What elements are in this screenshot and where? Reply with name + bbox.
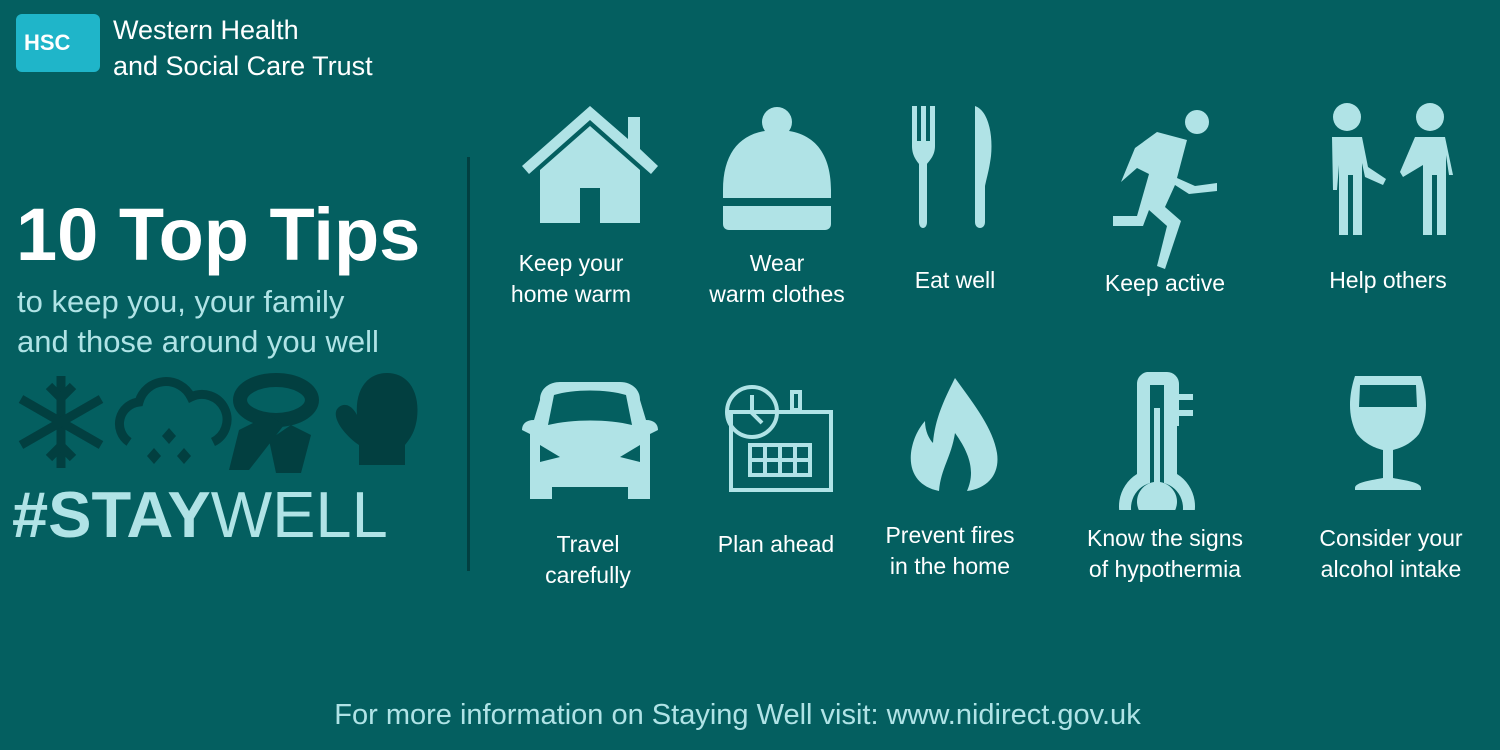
subtitle (17, 284, 379, 359)
label: clothes: warm clothes (709, 281, 845, 307)
org name: and Social Care Trust (113, 51, 373, 81)
icon: mitten (336, 373, 417, 465)
icon: plan (727, 387, 831, 490)
icon: hat (723, 107, 831, 230)
label: travel (545, 531, 631, 588)
label: clothes: Wear (750, 250, 804, 276)
footer: For more information on Staying Well visit: www.nidirect.gov.uk (334, 699, 1141, 731)
icon: cloud (119, 382, 227, 464)
label: alcohol: Consider your (1319, 525, 1463, 551)
label: hypothermia (1087, 525, 1243, 582)
label: fires: in the home (890, 553, 1010, 579)
label: home: home warm (511, 281, 631, 307)
icon: HSC badge (16, 14, 100, 72)
label: alcohol (1319, 525, 1463, 582)
label: clothes (709, 250, 845, 307)
divider (467, 157, 470, 571)
icon: car (522, 382, 658, 499)
label: travel: Travel (556, 531, 620, 557)
hashtag: #STAYWELL (12, 478, 388, 551)
icon: runner (1113, 110, 1217, 269)
label: hypothermia: Know the signs (1087, 525, 1243, 551)
subtitle: and those around you well (17, 324, 379, 359)
label: travel: carefully (545, 562, 631, 588)
winter icons (18, 373, 418, 473)
label: help: Help others (1329, 267, 1447, 293)
label: fires: Prevent fires (885, 522, 1015, 548)
label: hypothermia: of hypothermia (1089, 556, 1241, 582)
org name (113, 15, 373, 81)
label: active: Keep active (1105, 270, 1225, 296)
label: alcohol: alcohol intake (1321, 556, 1461, 582)
icon: house (522, 106, 658, 223)
label: home: Keep your (519, 250, 623, 276)
label: eat: Eat well (915, 267, 995, 293)
subtitle: to keep you, your family (17, 284, 344, 319)
tips grid (522, 103, 1453, 510)
title: 10 Top Tips (16, 193, 420, 276)
icon: cutlery (912, 106, 991, 228)
logo (16, 14, 373, 81)
label: home (511, 250, 631, 307)
icon: HSC badge: HSC (24, 30, 70, 55)
label: fires (885, 522, 1015, 579)
icon: snowflake (21, 376, 101, 468)
icon: flame (911, 378, 997, 491)
icon: scarf (229, 380, 312, 473)
icon: wine glass (1350, 376, 1426, 490)
icon: thermometer (1119, 372, 1195, 544)
org name: Western Health (113, 15, 299, 45)
label: plan: Plan ahead (718, 531, 834, 557)
icon: people (1332, 103, 1453, 235)
